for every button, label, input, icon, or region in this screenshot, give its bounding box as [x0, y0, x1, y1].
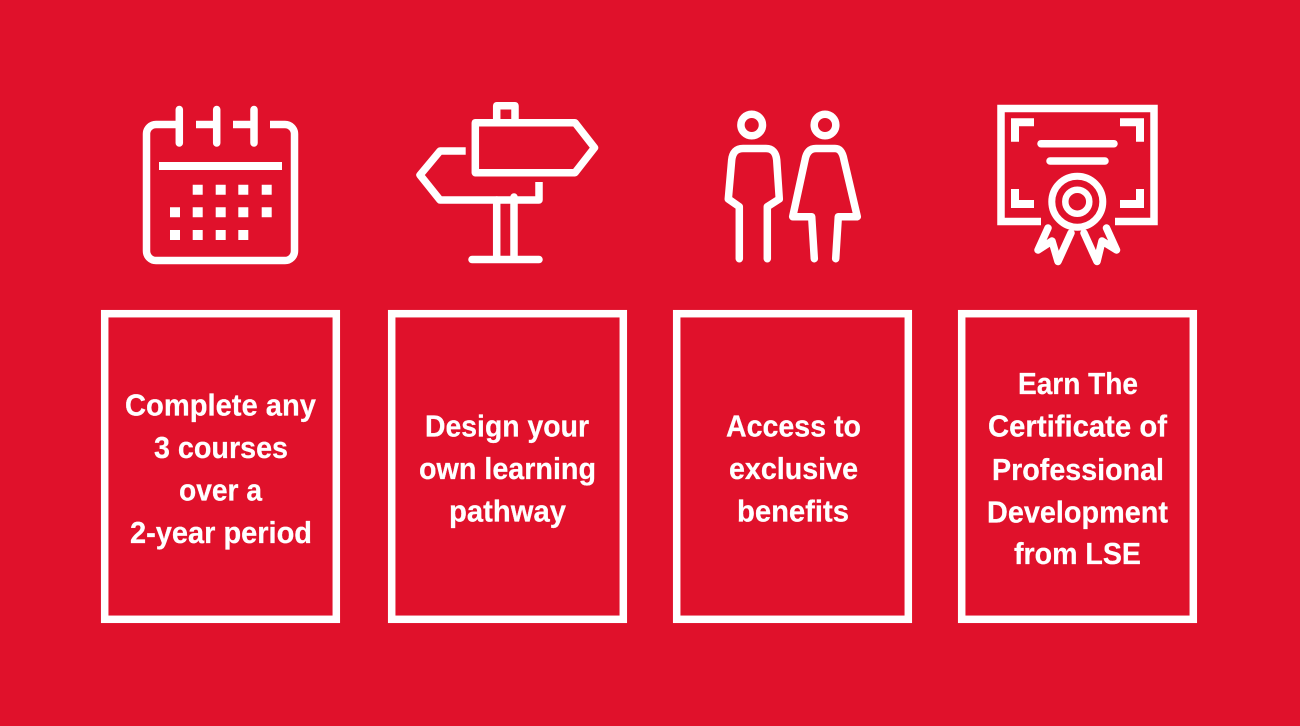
text: panel 4 label: Professional: [992, 453, 1164, 487]
panel: complete any 3 courses: [105, 314, 336, 619]
text: panel 4 label: from LSE: [1014, 537, 1141, 571]
text: panel 3 label: benefits: [737, 495, 849, 529]
text: panel 2 label: [419, 410, 596, 529]
text: panel 1 label: Complete any: [125, 388, 316, 422]
text: panel 1 label: [125, 388, 316, 550]
text: panel 2 label: pathway: [449, 495, 566, 529]
text: panel 1 label: 2-year period: [130, 516, 312, 550]
text: panel 4 label: Earn The: [1018, 367, 1138, 401]
text: panel 2 label: own learning: [419, 452, 596, 486]
icon: man and woman: [728, 114, 857, 259]
text: panel 4 label: [987, 367, 1168, 571]
text: panel 1 label: 3 courses: [154, 431, 288, 465]
text: panel 3 label: exclusive: [729, 452, 858, 486]
text: panel 1 label: over a: [179, 474, 263, 508]
text: panel 2 label: Design your: [425, 410, 589, 444]
text: panel 3 label: Access to: [726, 410, 861, 444]
panel: access to exclusive benefits: [677, 314, 908, 619]
panel: earn the certificate: [962, 314, 1193, 619]
icon: signpost: [420, 106, 594, 260]
text: panel 3 label: [726, 410, 861, 529]
panel: design your own learning pathway: [392, 314, 623, 619]
text: panel 4 label: Development: [987, 495, 1168, 529]
icon: calendar: [146, 110, 294, 260]
text: panel 4 label: Certificate of: [988, 410, 1168, 444]
icon: certificate with rosette: [1001, 108, 1154, 262]
